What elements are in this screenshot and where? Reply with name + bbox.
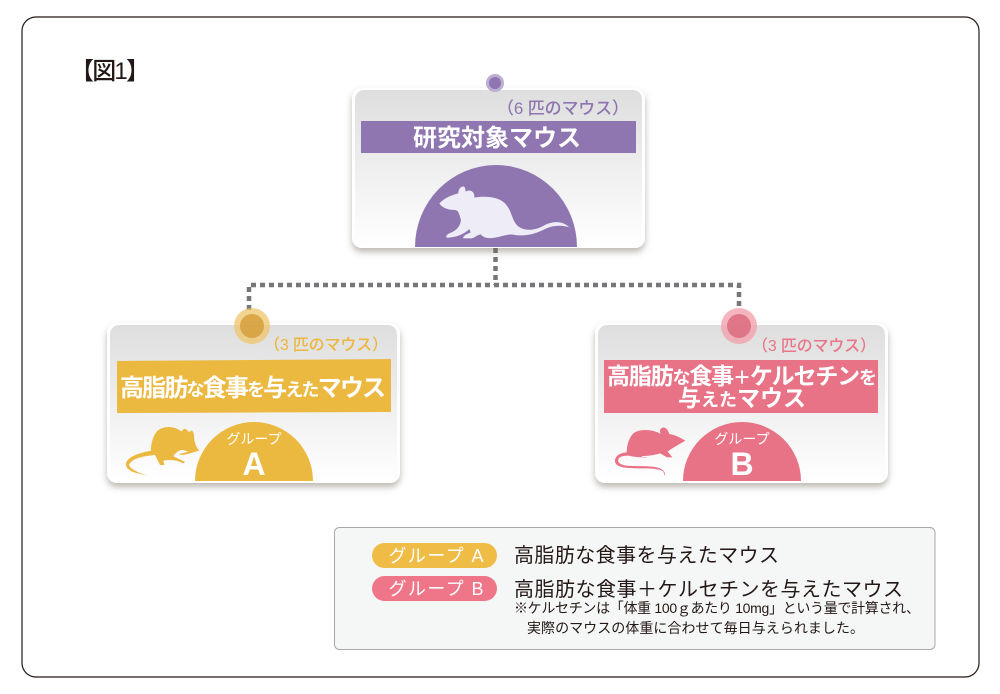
footnote: ※ケルセチンは「体重 100ｇあたり 10mg」という量で計算され、 <box>514 600 920 617</box>
footnote <box>514 600 920 636</box>
mouse count: yellow: （3 匹のマウス） <box>264 336 388 354</box>
semicircle: group B: B <box>730 446 754 482</box>
legend pill: group A <box>372 543 497 568</box>
banner: group B: 与えたマウス <box>678 385 806 411</box>
connector dot: purple <box>486 74 504 92</box>
panel: group A <box>107 308 400 483</box>
connector dot: pink <box>721 308 757 344</box>
panel: group B <box>595 308 888 483</box>
legend text: group B: 高脂肪な食事＋ケルセチンを与えたマウス <box>514 578 903 601</box>
banner: study mice: 研究対象マウス <box>413 125 581 152</box>
mouse count: purple: （6 匹のマウス） <box>497 99 629 118</box>
icon: white mouse <box>439 187 569 238</box>
connector dot: yellow <box>234 308 270 344</box>
semicircle: group B <box>683 422 801 482</box>
banner: group B: 高脂肪な食事＋ケルセチンを <box>607 363 877 389</box>
panel: legend <box>334 528 935 650</box>
figure title: 【図1】 <box>70 58 150 85</box>
connector lines <box>249 248 739 310</box>
legend pill: group B: グループ B <box>388 579 484 599</box>
legend text: group A: 高脂肪な食事を与えたマウス <box>514 544 779 567</box>
semicircle: group A: グループ <box>226 431 282 447</box>
banner: group A: 高脂肪な食事を与えたマウス <box>120 375 386 402</box>
banner: group B <box>604 360 878 413</box>
icon: yellow mouse <box>126 427 199 476</box>
legend pill: group A: グループ A <box>388 546 484 566</box>
semicircle: group A <box>195 422 313 482</box>
banner: group A <box>117 359 391 413</box>
semicircle: group B: グループ <box>714 431 770 447</box>
panel: study mice <box>352 74 645 248</box>
footnote: 実際のマウスの体重に合わせて毎日与えられました。 <box>527 620 864 636</box>
semicircle: group A: A <box>242 446 266 482</box>
icon: pink mouse <box>615 427 685 476</box>
semicircle with mouse <box>415 165 577 247</box>
mouse count: pink: （3 匹のマウス） <box>752 337 876 355</box>
legend pill: group B <box>372 576 497 601</box>
banner: study mice <box>361 121 636 153</box>
